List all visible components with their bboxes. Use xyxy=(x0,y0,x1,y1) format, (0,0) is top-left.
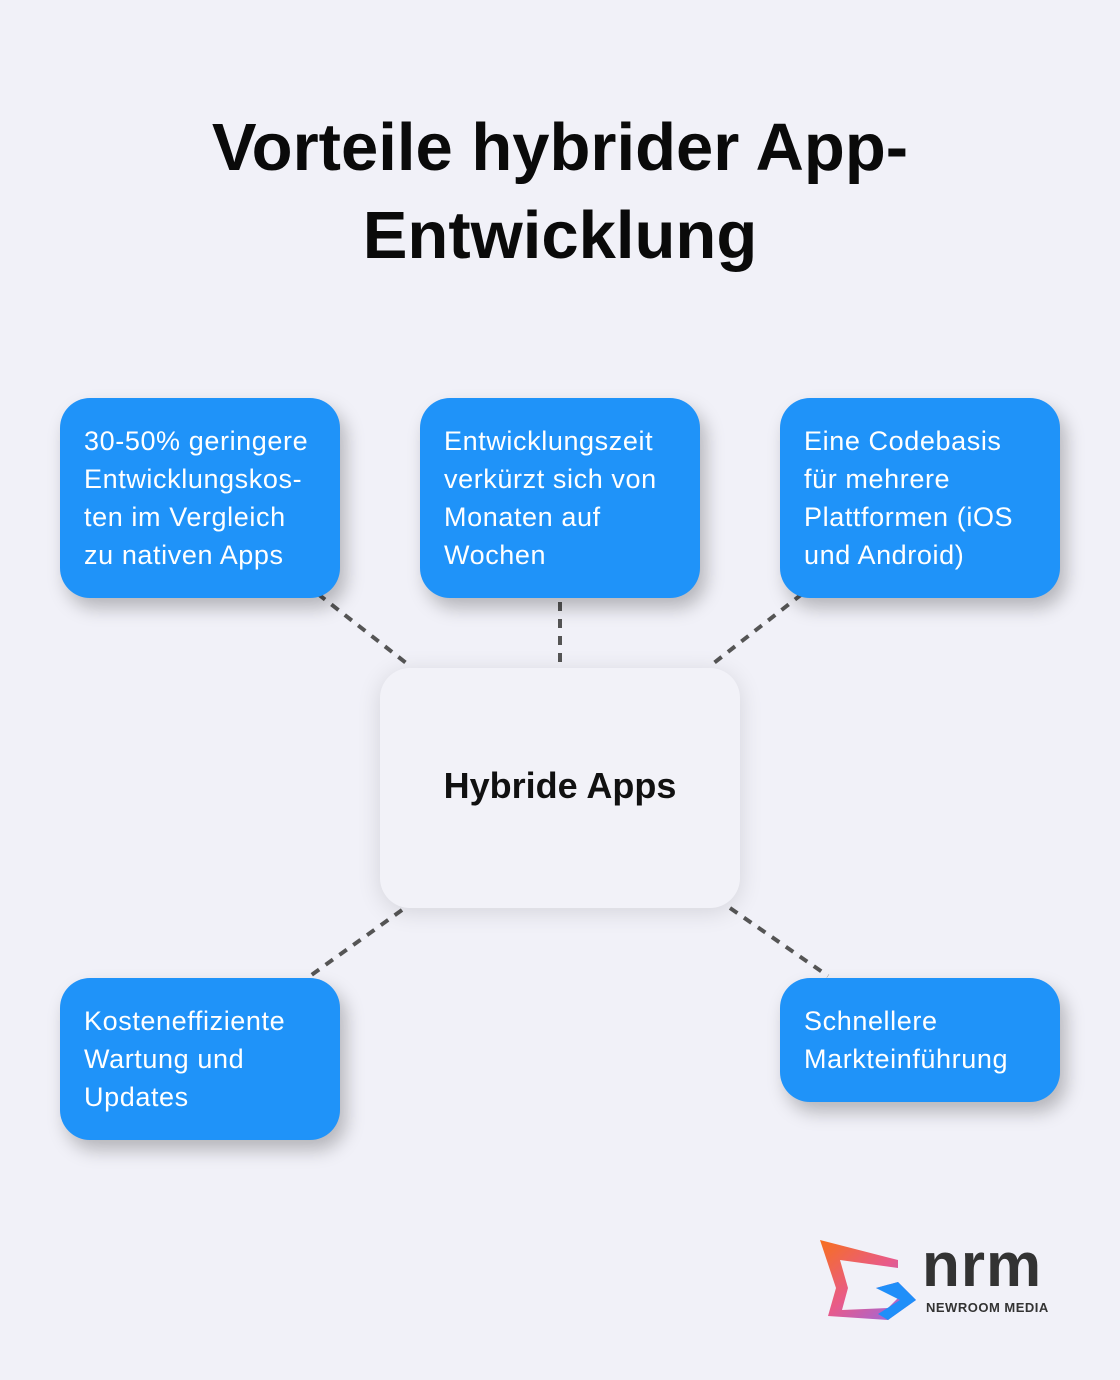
box: maintenance xyxy=(60,978,340,1140)
title: Entwicklung xyxy=(363,198,757,273)
box: market xyxy=(780,978,1060,1102)
box: costs: Entwicklungskos- xyxy=(84,464,302,494)
title xyxy=(212,110,908,273)
logo xyxy=(820,1231,1049,1320)
center node xyxy=(380,668,740,908)
box: maintenance: Wartung und xyxy=(84,1044,244,1074)
logo: nrm xyxy=(922,1231,1042,1300)
box: time: verkürzt sich von xyxy=(444,464,657,494)
box: time: Entwicklungszeit xyxy=(444,426,653,456)
box: maintenance: Updates xyxy=(84,1082,189,1112)
logo: NEWROOM MEDIA xyxy=(926,1300,1049,1315)
box: costs: zu nativen Apps xyxy=(84,540,284,570)
box: market: Schnellere xyxy=(804,1006,938,1036)
title: Vorteile hybrider App- xyxy=(212,110,908,185)
box: costs xyxy=(60,398,340,598)
center node: Hybride Apps xyxy=(444,765,676,806)
box: codebase xyxy=(780,398,1060,598)
box: maintenance: Kosteneffiziente xyxy=(84,1006,285,1036)
box: time xyxy=(420,398,700,598)
box: time: Monaten auf xyxy=(444,502,601,532)
box: costs: 30-50% geringere xyxy=(84,426,308,456)
box: codebase: und Android) xyxy=(804,540,964,570)
box: time: Wochen xyxy=(444,540,546,570)
box: codebase: für mehrere xyxy=(804,464,950,494)
box: codebase: Plattformen (iOS xyxy=(804,502,1013,532)
box: costs: ten im Vergleich xyxy=(84,502,286,532)
box: market: Markteinführung xyxy=(804,1044,1008,1074)
box: codebase: Eine Codebasis xyxy=(804,426,1002,456)
